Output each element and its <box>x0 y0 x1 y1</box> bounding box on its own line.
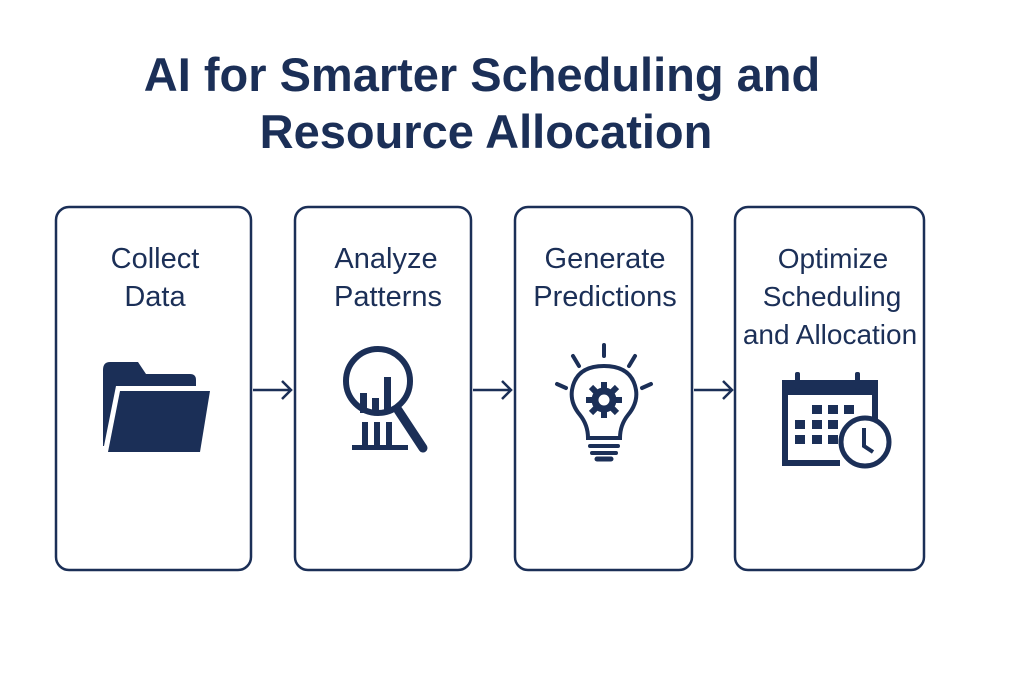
label: collect data <box>111 243 199 313</box>
panel: optimize scheduling <box>735 207 924 570</box>
icon: calendar clock <box>782 372 889 466</box>
panel: collect data <box>56 207 251 570</box>
label: optimize scheduling <box>743 243 917 350</box>
label: analyze patterns <box>334 243 442 313</box>
label: collect data: Data <box>124 281 186 313</box>
panel: analyze patterns <box>295 207 471 570</box>
title <box>144 48 820 158</box>
arrow 2 <box>473 381 511 399</box>
title: Resource Allocation <box>260 105 712 158</box>
label: optimize scheduling: Scheduling <box>763 281 901 312</box>
title: AI for Smarter Scheduling and <box>144 48 820 101</box>
label: optimize scheduling: Optimize <box>778 243 888 274</box>
label: analyze patterns: Analyze <box>334 243 438 275</box>
label: optimize scheduling: and Allocation <box>743 319 917 350</box>
label: analyze patterns: Patterns <box>334 281 442 313</box>
label: generate predictions <box>533 243 677 313</box>
label: collect data: Collect <box>111 243 199 275</box>
panel: generate predictions <box>515 207 692 570</box>
arrow 3 <box>694 381 732 399</box>
icon: magnifier chart <box>346 349 423 450</box>
label: generate predictions: Generate <box>545 243 665 275</box>
icon: folder <box>103 362 210 452</box>
arrow 1 <box>253 381 291 399</box>
label: generate predictions: Predictions <box>533 281 677 313</box>
icon: lightbulb gear <box>557 345 651 459</box>
